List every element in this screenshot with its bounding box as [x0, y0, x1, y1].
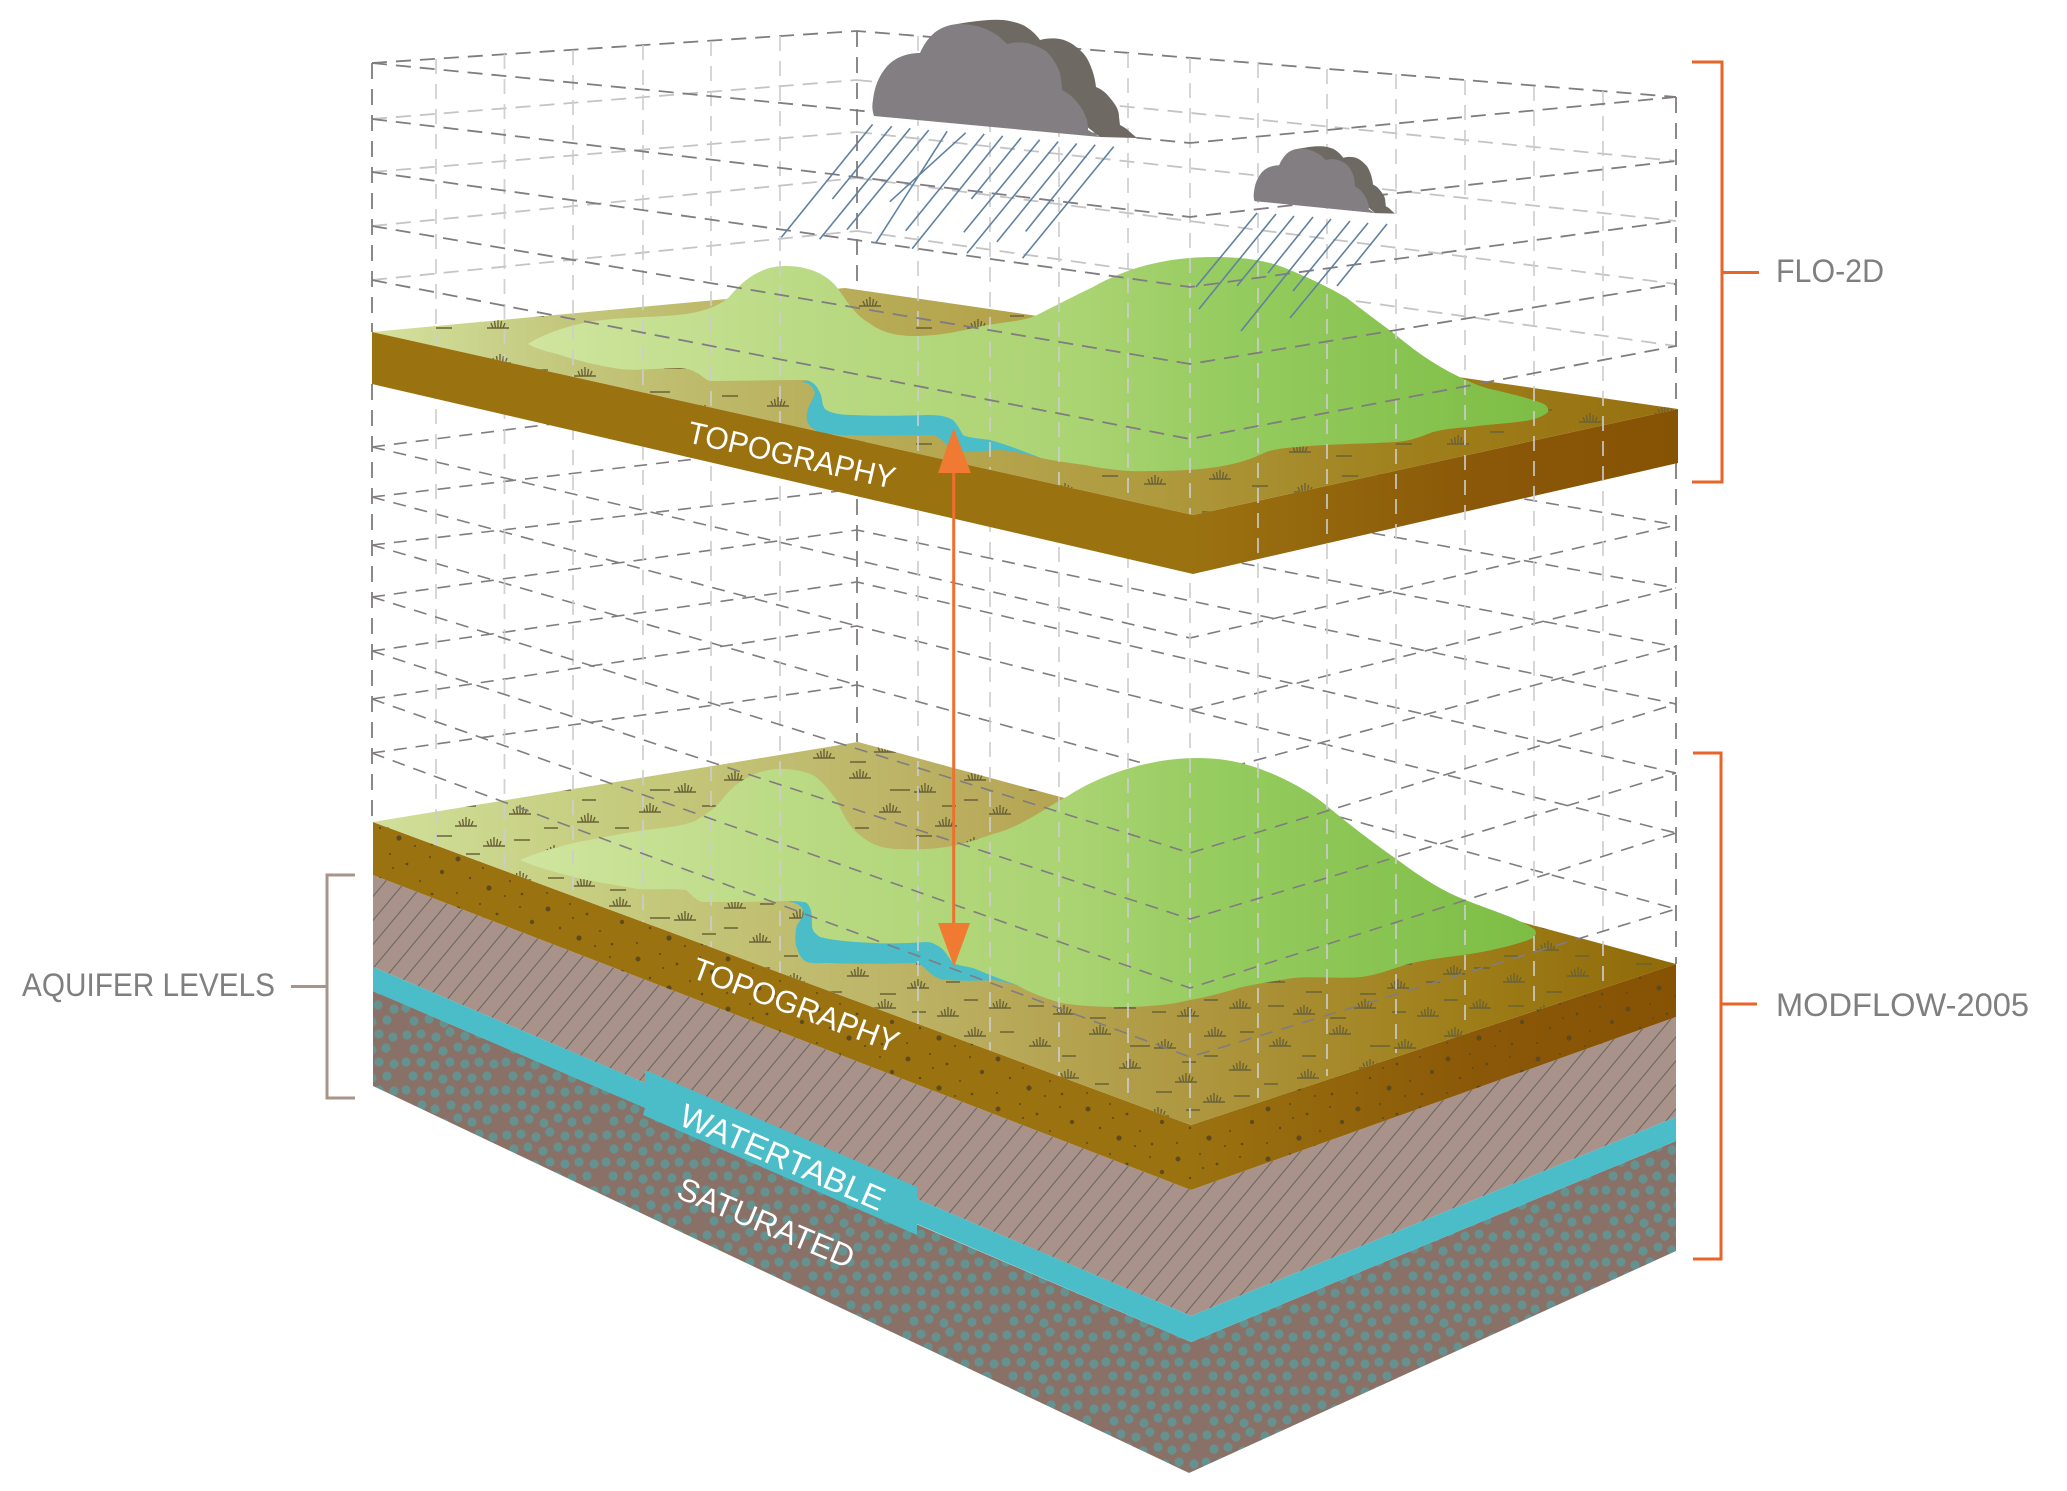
upper hills — [528, 257, 1548, 471]
rain from large cloud — [781, 124, 1114, 258]
bracket: MODFLOW-2005 — [1693, 753, 1757, 1259]
grid: lower box lines between slabs — [372, 385, 1676, 909]
grid: front lines of lower box — [372, 597, 1676, 1057]
lower terrain surface — [373, 742, 1676, 1125]
lower hills — [520, 758, 1536, 1007]
lower river — [787, 895, 1017, 985]
icon: small rain cloud — [1254, 146, 1395, 214]
icon: large rain cloud — [872, 20, 1137, 138]
bracket: aquifer levels — [291, 875, 355, 1098]
upper slab right face — [1193, 409, 1678, 574]
layer label: watertable: WATERTABLE — [674, 1096, 891, 1218]
arrow: exchange between models — [938, 428, 971, 967]
rain from small cloud — [1196, 213, 1387, 331]
lower block: stacked model layers — [373, 742, 1676, 1473]
layer label: saturated: SATURATED — [672, 1170, 860, 1275]
layer: aquifer hatched band — [373, 875, 1676, 1316]
upper terrain surface — [372, 288, 1678, 515]
grid: back lines of upper box — [372, 31, 1676, 964]
upper river — [800, 378, 1041, 458]
layer label: upper topography: TOPOGRAPHY — [684, 415, 899, 496]
bracket: FLO-2D — [1692, 62, 1759, 482]
label: MODFLOW-2005: MODFLOW-2005 — [1776, 987, 2029, 1023]
layer: water table band — [373, 967, 1676, 1342]
layer label: lower topography: TOPOGRAPHY — [688, 951, 904, 1060]
layer: saturated zone — [373, 991, 1676, 1473]
label: FLO-2D: FLO-2D — [1776, 253, 1884, 289]
grid: front lines of upper box — [372, 63, 1676, 439]
grid: light vertical lines — [436, 36, 1603, 1118]
upper slab: topography surface — [372, 257, 1678, 574]
layer: lower soil right face — [1191, 964, 1676, 1190]
layer: lower soil left face — [373, 822, 1191, 1190]
label: aquifer levels: AQUIFER LEVELS — [22, 967, 275, 1003]
upper slab left face — [372, 332, 1193, 574]
